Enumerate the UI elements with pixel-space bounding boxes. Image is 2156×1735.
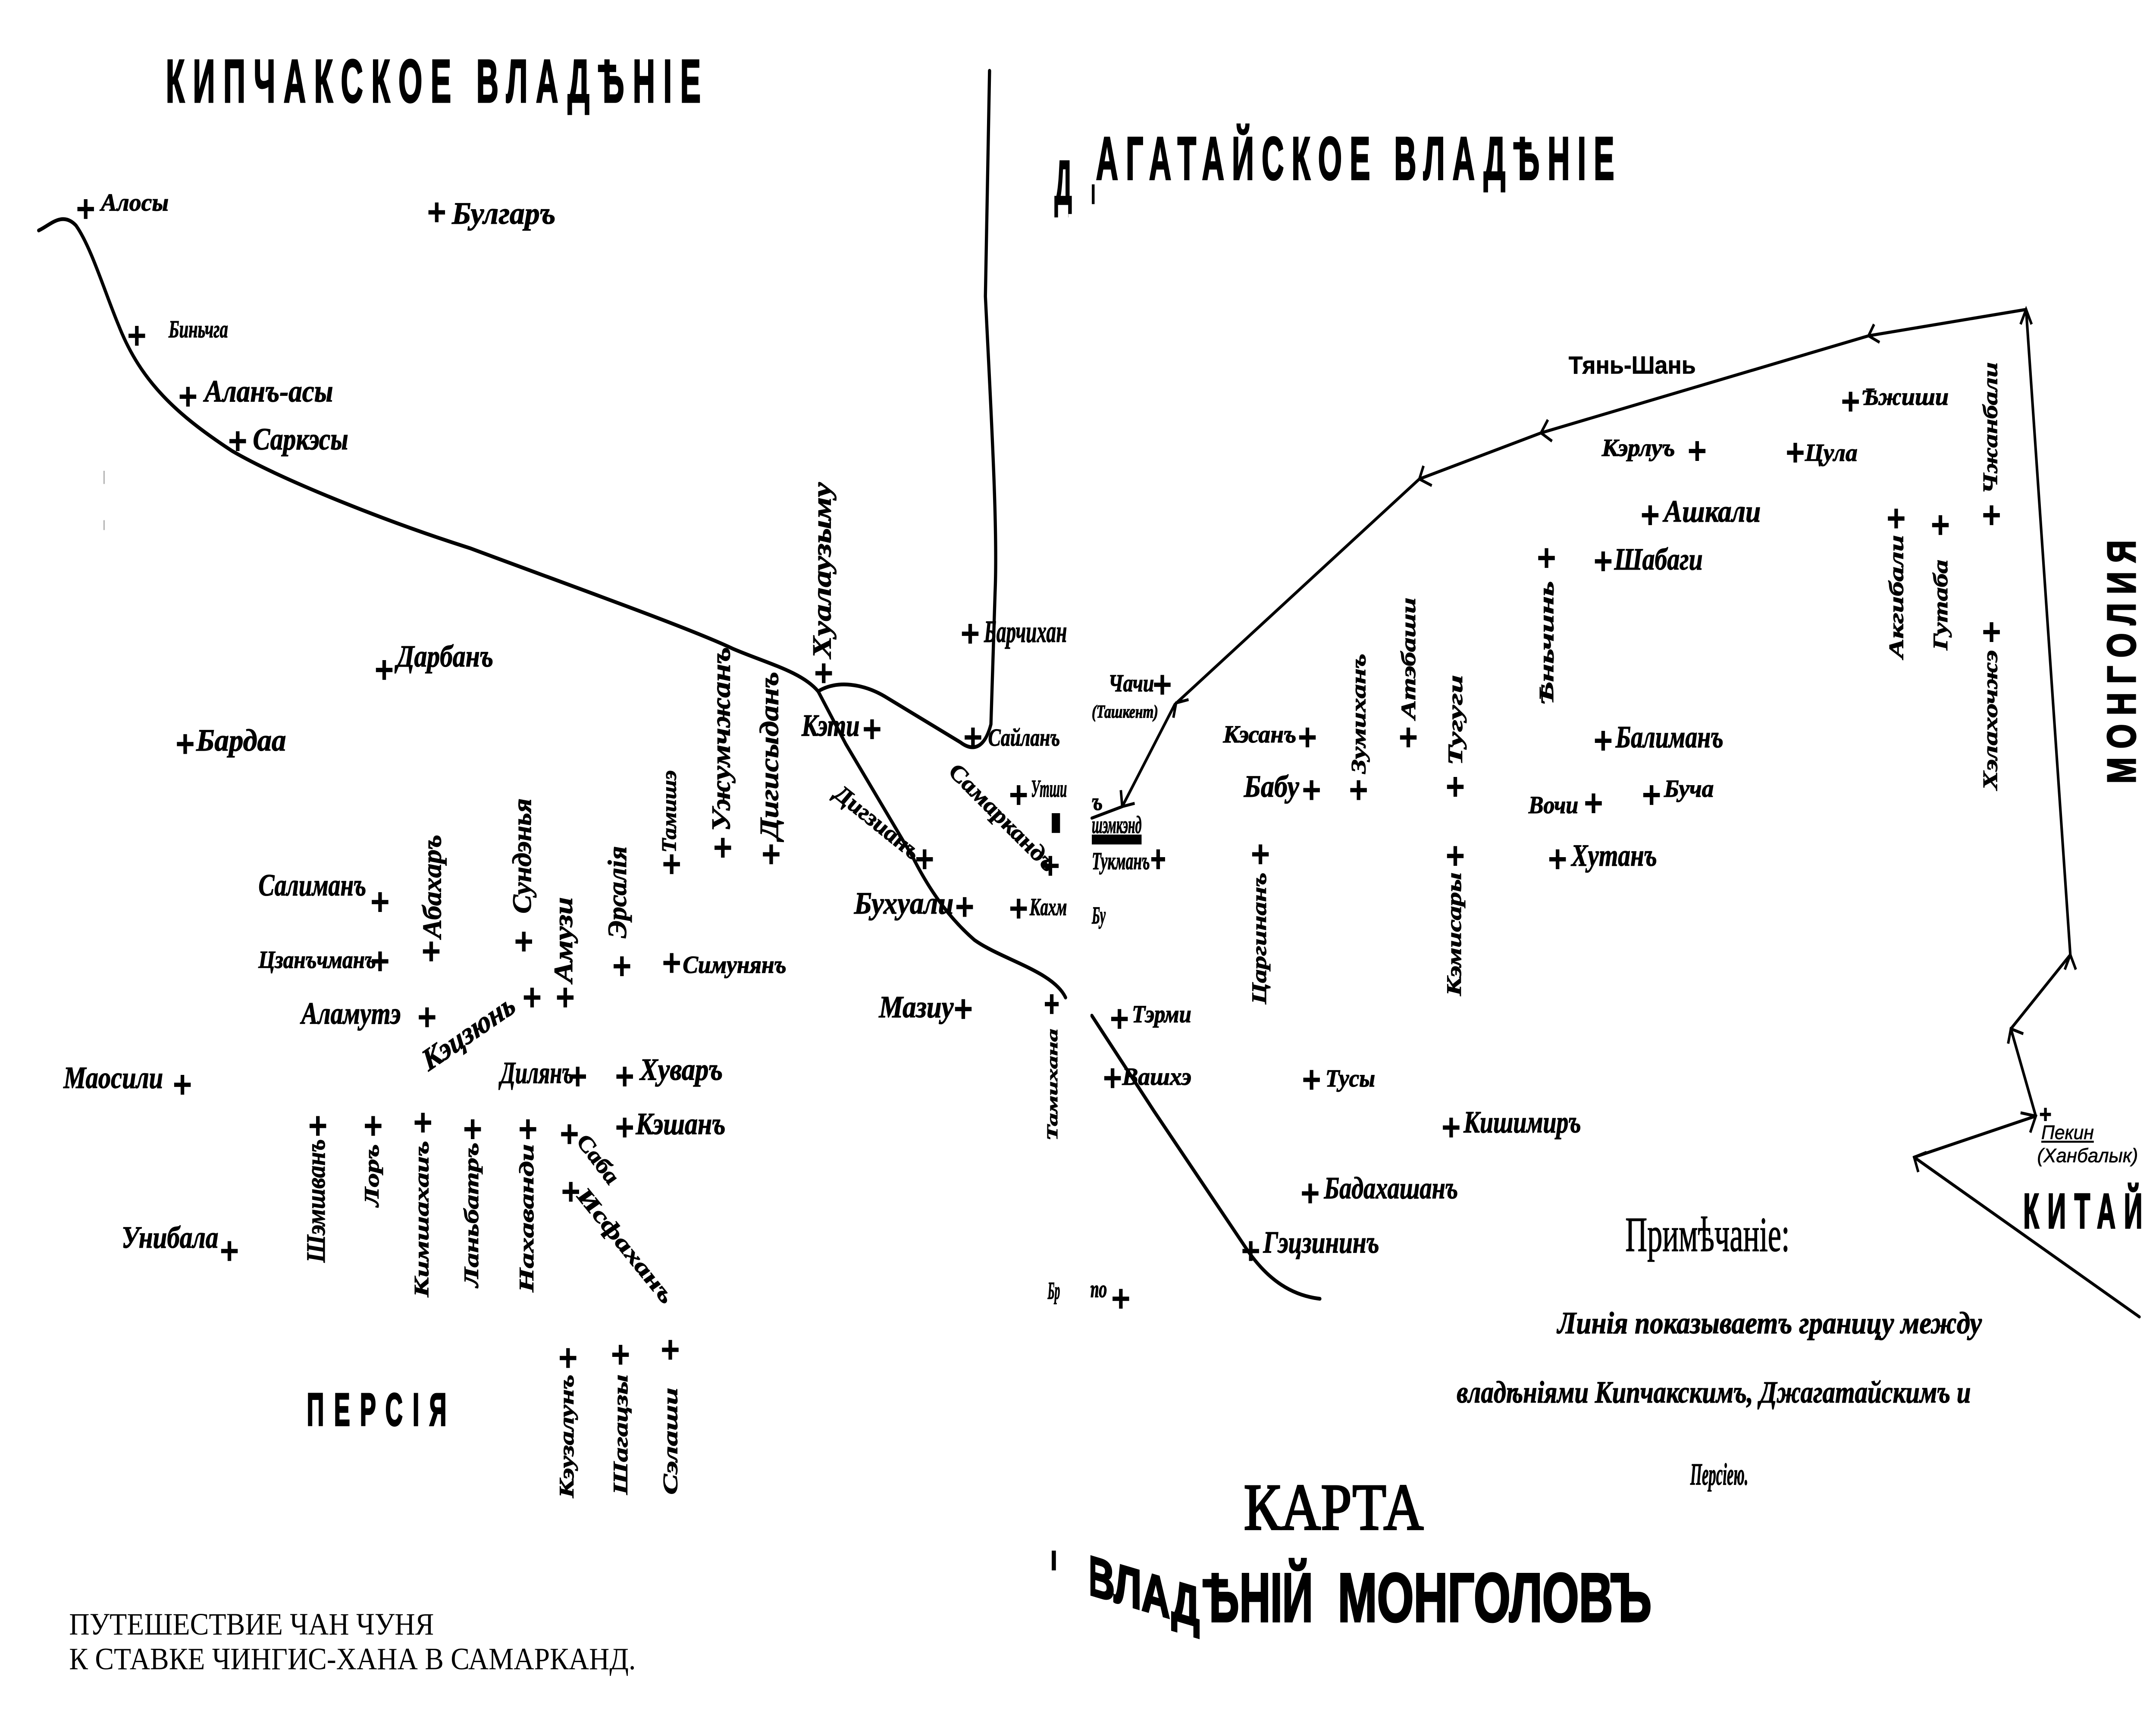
blank strip along the map join [1069, 214, 1091, 1663]
place: Алосы [77, 189, 169, 219]
place: Бадахашанъ: Бадахашанъ [1324, 1171, 1458, 1206]
place: Кэрлуъ: Кэрлуъ [1601, 435, 1675, 462]
place: Утши: Утши [1031, 775, 1067, 802]
place: Атэбаши: Атэбаши [1397, 598, 1420, 721]
place fragment: то: Бр [1047, 1277, 1060, 1304]
place: Вочи: Вочи [1528, 792, 1578, 819]
place: Дарбанъ [376, 639, 493, 680]
place: Саба: Саба [573, 1128, 623, 1190]
note text: Персіею. [1690, 1457, 1748, 1492]
arrowheads [1121, 310, 2076, 1172]
place: Лоръ [360, 1116, 383, 1208]
place: Исфаханъ: Исфаханъ [573, 1181, 677, 1309]
place: Тугуги [1444, 675, 1467, 797]
place: Буча: Буча [1664, 775, 1714, 802]
place: Вашхэ [1104, 1063, 1191, 1090]
place: Эрсалія [603, 846, 632, 976]
place: Биньчга: Биньчга [168, 316, 228, 343]
caption: ПУТЕШЕСТВИЕ ЧАН ЧУНЯ [69, 1607, 434, 1641]
place: Ѣньчинь [1536, 548, 1558, 704]
place: Сайланъ: Сайланъ [988, 724, 1060, 751]
place: Ѣньчинь: Ѣньчинь [1536, 581, 1558, 704]
border line: Kipchak and Jagatai [818, 71, 996, 747]
place: Сэлаши: Сэлаши [659, 1387, 682, 1495]
place: Ланьбатръ: Ланьбатръ [460, 1143, 483, 1288]
place: Тамишэ: Тамишэ [658, 770, 680, 853]
fragments along the missing strip [1052, 789, 1106, 929]
place: Гэцзининъ: Гэцзининъ [1263, 1225, 1379, 1260]
place: Абахаръ: Абахаръ [418, 835, 447, 940]
place: Ужумчжанъ: Ужумчжанъ [707, 647, 736, 831]
place: Исфаханъ [562, 1181, 677, 1309]
place: Гутаба [1929, 515, 1952, 651]
place: Сайланъ [965, 724, 1060, 751]
note text [1457, 1306, 1982, 1492]
place: Эрсалія: Эрсалія [603, 846, 632, 938]
place: Шэмшванъ: Шэмшванъ [302, 1139, 331, 1263]
place: Чжанбали: Чжанбали [1979, 362, 2002, 494]
heading: Persia: ПЕРСІЯ [307, 1384, 446, 1436]
place: Вочи [1528, 792, 1602, 819]
heading: China: КИТАЙ [2023, 1183, 2143, 1239]
place: Ашкали: Ашкали [1662, 494, 1761, 529]
place: Чачи (Ташкент): (Ташкент) [1092, 702, 1158, 722]
place: Бабу: Бабу [1244, 769, 1299, 804]
place: Биньчга [128, 316, 228, 346]
place: Пекин (Ханбалык): Пекин [2041, 1121, 2094, 1143]
place: Дилянъ: Дилянъ [498, 1055, 573, 1090]
place: Симунянъ: Симунянъ [683, 952, 787, 978]
place: Кахм: Кахм [1029, 894, 1067, 921]
map title: line two: ѢНІЙ [1202, 1558, 1313, 1636]
place: Буча [1643, 775, 1714, 805]
place: Алосы: Алосы [100, 189, 169, 216]
place: Саркэсы: Саркэсы [253, 422, 348, 457]
note heading: Примѣчаніе: [1625, 1207, 1790, 1262]
place: Ѣжиши: Ѣжиши [1862, 383, 1949, 410]
map title: line two: МОНГОЛОВЪ [1338, 1560, 1651, 1636]
place: Аламутэ: Аламутэ [300, 996, 401, 1031]
place fragment: то: то [1086, 1276, 1107, 1303]
place: Сундэнья [508, 799, 536, 952]
heading: Jagatai domain: Д [1055, 148, 1072, 218]
place: Шагацзы [609, 1345, 632, 1495]
place: Кишимиръ: Кишимиръ [1463, 1105, 1581, 1140]
place: Хуваръ: Хуваръ [639, 1052, 723, 1087]
place: Сундэнья: Сундэнья [508, 799, 536, 914]
place: Пекин (Ханбалык): (Ханбалык) [2037, 1144, 2138, 1166]
label: Tian Shan: Тянь-Шань [1569, 352, 1696, 379]
caption [69, 1607, 636, 1676]
place: Зумиханъ: Зумиханъ [1348, 654, 1370, 774]
note text: Линія показываетъ границу между [1556, 1306, 1982, 1340]
place: Нахаванди: Нахаванди [515, 1144, 538, 1293]
place: Шагацзы: Шагацзы [609, 1375, 632, 1495]
place: Тамихана [1044, 994, 1061, 1141]
heading: Mongolia: МОНГОЛИЯ [2099, 540, 2144, 783]
place: Кэсанъ [1222, 721, 1316, 748]
place: Кахм [1010, 894, 1067, 921]
place: Саба [561, 1124, 623, 1190]
place: Цула: Цула [1805, 439, 1858, 467]
place: Кэшанъ: Кэшанъ [635, 1107, 726, 1141]
heading: Jagatai domain [1055, 125, 1614, 218]
place: Балиманъ: Балиманъ [1615, 720, 1724, 755]
fragments along the missing strip: ъ [1092, 789, 1103, 815]
place: Салиманъ: Салиманъ [258, 868, 366, 902]
place: Дигисыданъ: Дигисыданъ [755, 672, 784, 842]
place: Пекин (Ханбалык) [2037, 1108, 2138, 1166]
map title: line two: ВЛАД [1086, 1543, 1200, 1639]
note text: владѣніями Кипчакскимъ, Джагатайскимъ и [1457, 1375, 1971, 1409]
place: Кэузалунъ: Кэузалунъ [555, 1375, 578, 1498]
place: Бухуали: Бухуали [854, 886, 954, 921]
place: Тукманъ: Тукманъ [1092, 848, 1150, 875]
place: Дарбанъ: Дарбанъ [395, 639, 493, 673]
arrow route: Chang Chun journey [1092, 310, 2140, 1317]
place: Тусы [1303, 1065, 1375, 1092]
place: Хэлахочжэ: Хэлахочжэ [1979, 650, 2002, 791]
place: Цзанъчманъ: Цзанъчманъ [258, 946, 376, 974]
place: Кэсанъ: Кэсанъ [1222, 721, 1296, 748]
fragments along the missing strip: Бу [1091, 902, 1106, 929]
place: Бардаа: Бардаа [196, 723, 286, 758]
place: Гутаба: Гутаба [1929, 560, 1952, 651]
place: Барчихан [962, 614, 1067, 649]
place: Ѣжиши [1842, 383, 1949, 411]
place: Кэцзюнь: Кэцзюнь [417, 987, 520, 1078]
place: Чачи (Ташкент): Чачи [1109, 670, 1154, 697]
place: Шабаги: Шабаги [1614, 542, 1703, 576]
place fragment: то [1047, 1276, 1129, 1309]
place: Унибала: Унибала [122, 1220, 218, 1255]
place: Кэрлуъ [1601, 435, 1705, 462]
place fragment: шэмкэнд [1092, 811, 1141, 845]
place: Тэрми: Тэрми [1132, 1001, 1191, 1028]
place: Тэрми [1111, 1001, 1191, 1029]
place: Акгибали: Акгибали [1885, 535, 1908, 660]
place: Хуалаузыму: Хуалаузыму [808, 482, 837, 659]
place: Чачи (Ташкент) [1092, 670, 1171, 722]
place: Утши [1010, 775, 1067, 805]
place: Мазиу: Мазиу [879, 990, 954, 1024]
border line: Kipchak and Persia [39, 219, 818, 691]
place: Вашхэ: Вашхэ [1122, 1063, 1191, 1090]
place: Булгаръ: Булгаръ [451, 196, 555, 231]
place: Акгибали [1885, 509, 1908, 660]
border line: Jagatai and Persia north [818, 691, 1065, 998]
place: Хутанъ: Хутанъ [1571, 838, 1657, 873]
place: Нахаванди [515, 1119, 538, 1293]
place: Дигзианъ: Дигзианъ [829, 778, 924, 866]
place: Барчихан: Барчихан [984, 614, 1067, 649]
place: Кимшахаиъ: Кимшахаиъ [411, 1141, 433, 1298]
border line: Jagatai and Persia south [1092, 1016, 1320, 1299]
map title: line one: КАРТА [1244, 1471, 1423, 1544]
place: Тамихана: Тамихана [1044, 1029, 1061, 1141]
place: Тугуги: Тугуги [1444, 675, 1467, 765]
place: Лоръ: Лоръ [360, 1144, 383, 1208]
place: Самаркандъ: Самаркандъ [945, 757, 1059, 877]
map title: line two [1052, 1543, 1651, 1639]
place: Кэмисары: Кэмисары [1443, 872, 1466, 996]
place: Кэти: Кэти [801, 708, 860, 743]
place: Тусы: Тусы [1326, 1065, 1375, 1092]
place fragment: шэмкэнд: шэмкэнд [1092, 811, 1141, 839]
heading: Jagatai domain: АГАТАЙСКОЕ ВЛАДѢНІЕ [1096, 125, 1614, 192]
place: Маосили: Маосили [63, 1061, 163, 1095]
place: Атэбаши [1397, 598, 1420, 747]
place: Цула [1787, 439, 1858, 467]
place: Амузи: Амузи [549, 897, 578, 985]
caption: К СТАВКЕ ЧИНГИС-ХАНА В САМАРКАНД. [69, 1641, 636, 1676]
place: Сэлаши [659, 1340, 682, 1495]
heading: Kipchak domain: КИПЧАКСКОЕ ВЛАДѢНІЕ [166, 47, 701, 115]
place: Аланъ-асы: Аланъ-асы [203, 374, 333, 409]
place: Царгинанъ: Царгинанъ [1248, 872, 1271, 1005]
